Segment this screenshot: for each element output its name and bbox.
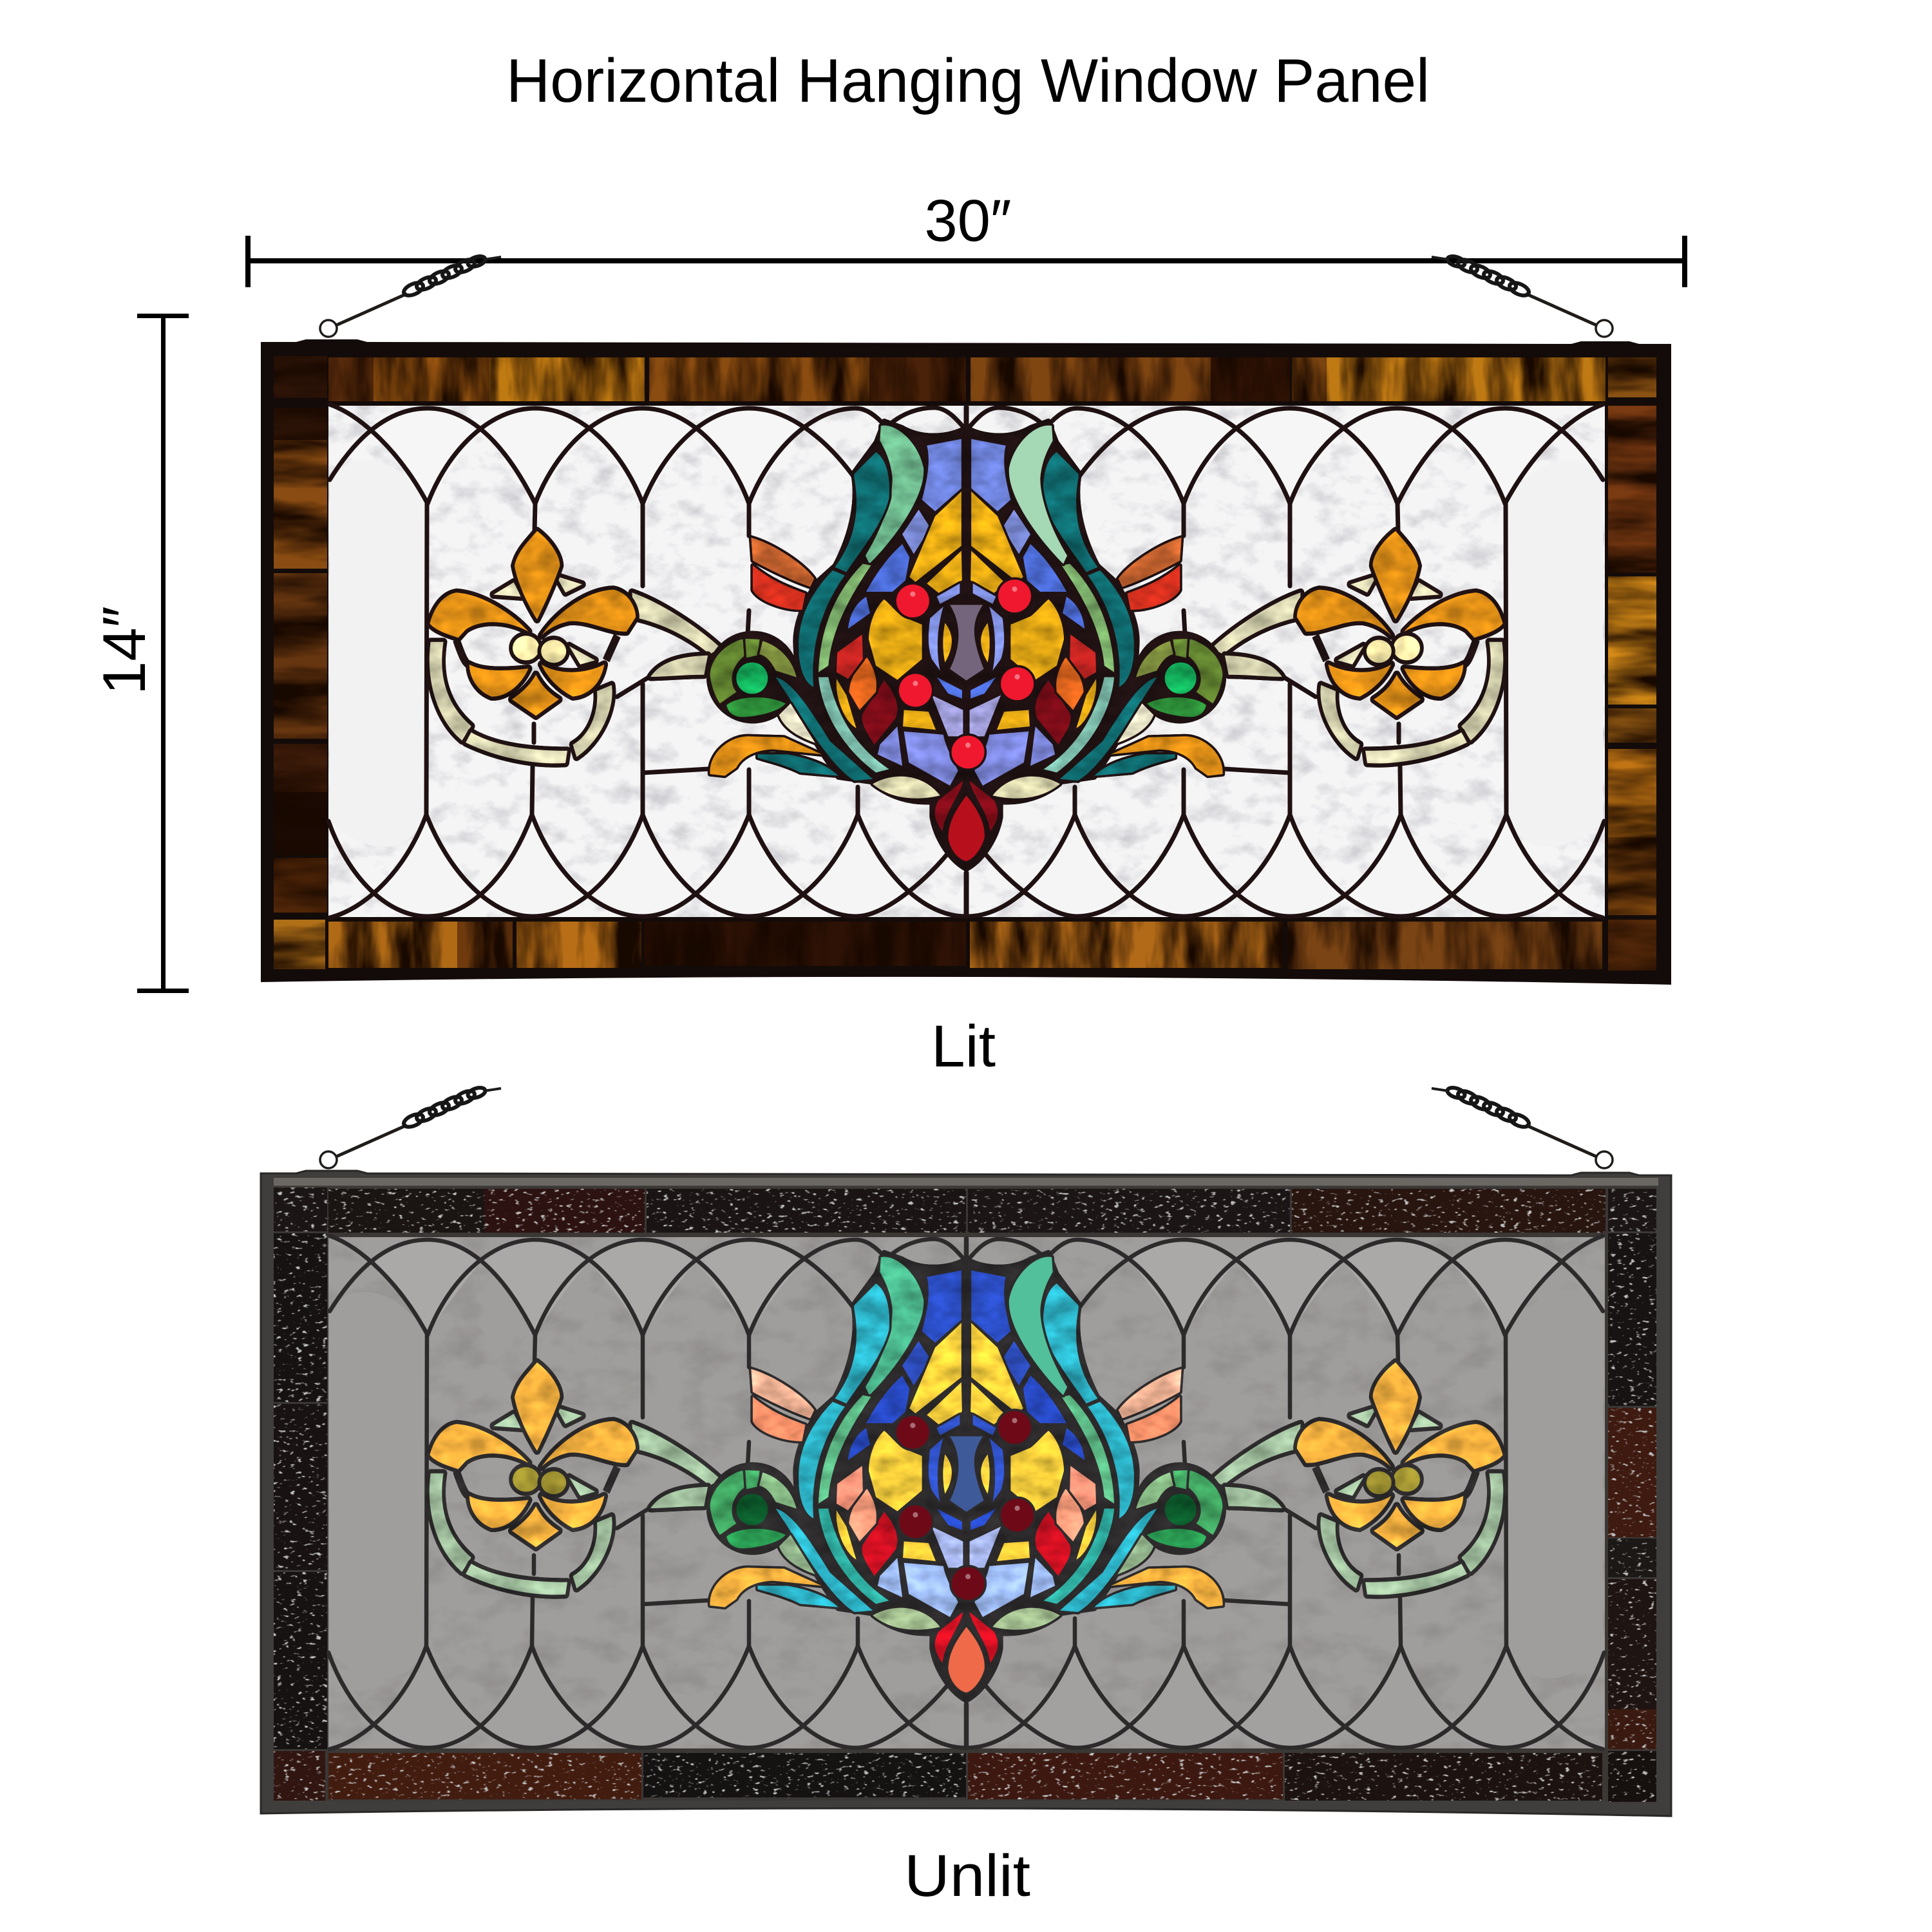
fleur-de-lis and scroll: [430, 531, 721, 763]
right half: mirrored lattice, fleur-de-lis and motif: [966, 404, 1604, 918]
horizontal dark border strips: [328, 1189, 1605, 1801]
height dimension line: [137, 314, 189, 993]
left half: lattice, fleur-de-lis and centre motif: [328, 404, 967, 918]
centre jewels, purple pane and tip: [896, 1257, 1067, 1692]
lead lines: [328, 404, 966, 918]
centre purple pane: [950, 605, 984, 681]
outer swooshes: [776, 426, 923, 781]
smooth outer column glass: [330, 460, 428, 847]
unlit caption: Unlit: [904, 1843, 1030, 1909]
glass background: [328, 1237, 1605, 1748]
blue and yellow panes: [848, 439, 963, 786]
metal frame: [261, 339, 1671, 985]
red jewels: [896, 580, 1034, 768]
bottom tip: [948, 795, 985, 861]
green ring backing: [709, 633, 797, 721]
scroll arms: [430, 576, 721, 763]
width dimension line: [245, 236, 1687, 287]
left half: lattice, fleur-de-lis and motif: [328, 1236, 967, 1749]
vertical amber border strips: [274, 356, 1656, 971]
fleur petals: [430, 531, 636, 716]
top frame highlight: [274, 1178, 1658, 1186]
lower scale glass cells: [370, 815, 912, 916]
right half: mirrored lattice, fleur-de-lis and motif: [966, 1236, 1604, 1749]
width label: 30″: [925, 188, 1011, 254]
fleur beads: [513, 636, 566, 663]
red and orange diamonds: [837, 634, 897, 744]
vertical dark border strips: [274, 1188, 1656, 1802]
height label: 14″: [90, 606, 158, 695]
motif lead backing: [774, 421, 967, 869]
right pale swoosh: [1009, 426, 1067, 564]
panel: lit window: [261, 254, 1671, 985]
dark backing behind border: [274, 1187, 1656, 1801]
lit caption: Lit: [931, 1014, 996, 1079]
centre jewels, purple pane, tip and right swoosh: [896, 426, 1067, 861]
metal frame: [261, 1171, 1671, 1816]
upper arch glass cells: [375, 408, 802, 504]
panel: unlit window: [261, 1086, 1671, 1816]
right hanging chain: [1432, 1086, 1613, 1168]
lower foot and leaves: [710, 703, 963, 831]
horizontal amber border strips: [328, 357, 1605, 969]
green ring panes and jewel: [710, 639, 797, 717]
glass background: [328, 406, 1605, 917]
title: Horizontal Hanging Window Panel: [506, 46, 1430, 115]
right hanging chain: [1432, 254, 1613, 337]
lead lattice: [328, 404, 966, 918]
left hanging chain: [320, 1086, 501, 1168]
centre motif left half: [709, 421, 967, 869]
side leaves: [751, 538, 814, 610]
left hanging chain: [320, 254, 501, 337]
